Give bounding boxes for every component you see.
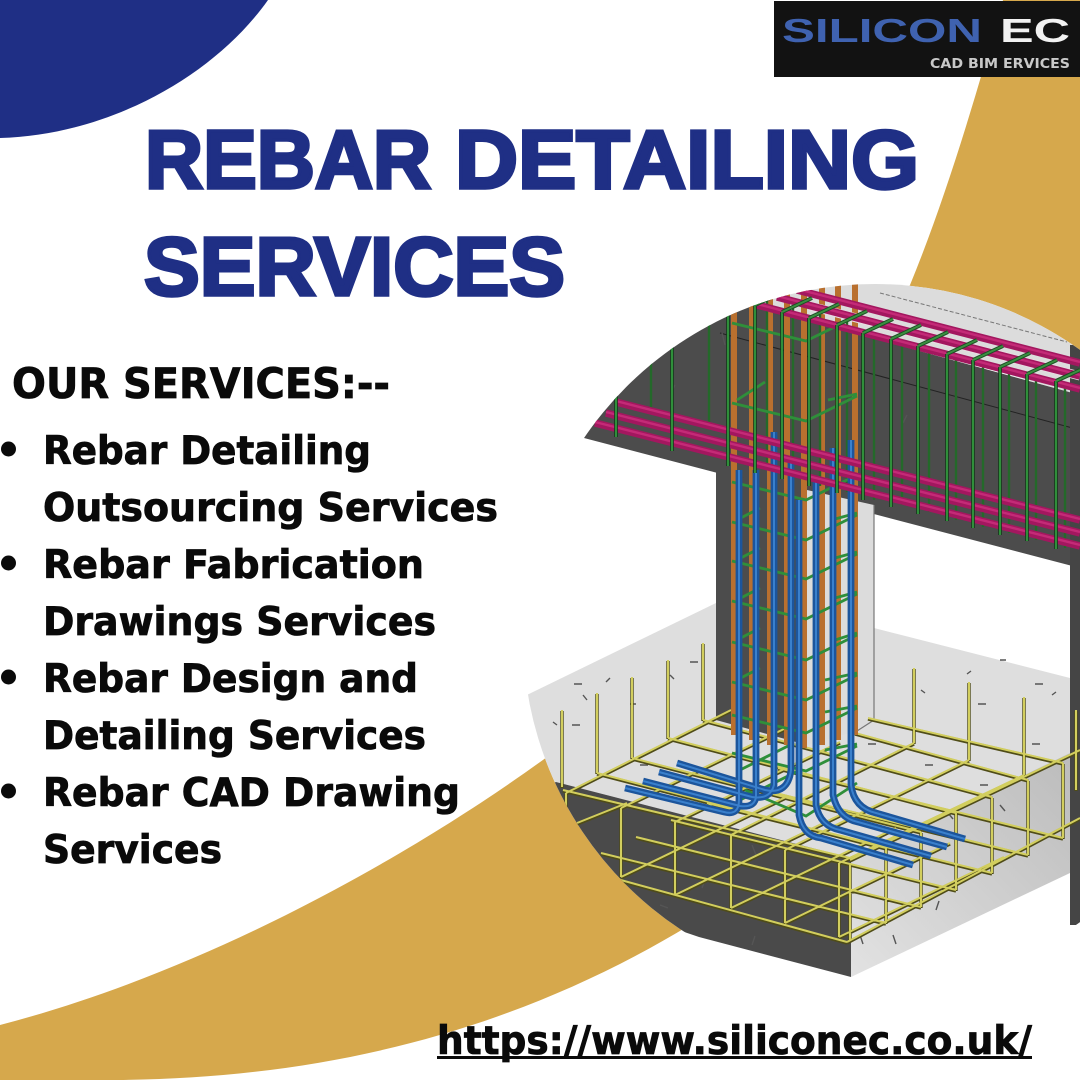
yellow footing mesh [562,643,1080,943]
title: REBAR [145,113,431,206]
title: SERVICES [144,220,565,313]
slab right face [851,753,1070,977]
title: DETAILING [455,113,919,206]
green beam stirrups, front [616,270,1080,549]
list item: CAD: Services [43,828,222,873]
green column hoops [732,316,857,816]
circular rebar model illustration [500,270,1080,1000]
list item: design: Detailing Services [43,714,426,759]
list item: fabrication [1,543,436,645]
list item: fabrication: Rebar Fabrication [43,543,424,588]
beam top surface [764,284,1080,392]
list item: CAD: Rebar CAD Drawing [43,771,460,816]
services list [1,429,498,873]
slab top surface [500,603,1070,858]
list item: outsourcing: Rebar Detailing [43,429,371,474]
list item: outsourcing: Outsourcing Services [43,486,498,531]
magenta beam bars [595,289,1080,546]
logo: Silicon EC: EC [1000,12,1070,49]
list item: CAD [1,771,460,873]
services heading: OUR SERVICES:-- [12,359,390,408]
slab left face [554,782,851,977]
navy corner shape [0,0,268,138]
list item: fabrication: Drawings Services [43,600,436,645]
website link: https://www.siliconec.co.uk/ [437,1019,1033,1064]
orange column bars [734,270,855,748]
beam side face [584,306,1070,566]
column light face [807,490,874,603]
logo: Silicon EC: SILICON [782,12,982,49]
list item: design: Rebar Design and [43,657,418,702]
column dark face [716,470,807,745]
list item: design [1,657,426,759]
list item: outsourcing [1,429,498,531]
blue dowel bars [625,432,965,865]
title [144,113,919,313]
right wall edge [1070,345,1080,925]
logo: Silicon EC [774,1,1080,77]
green beam stirrups, rear [650,300,1066,548]
concrete surface ticks [553,333,1056,945]
logo: Silicon EC: CAD BIM ERVICES [930,57,1070,72]
